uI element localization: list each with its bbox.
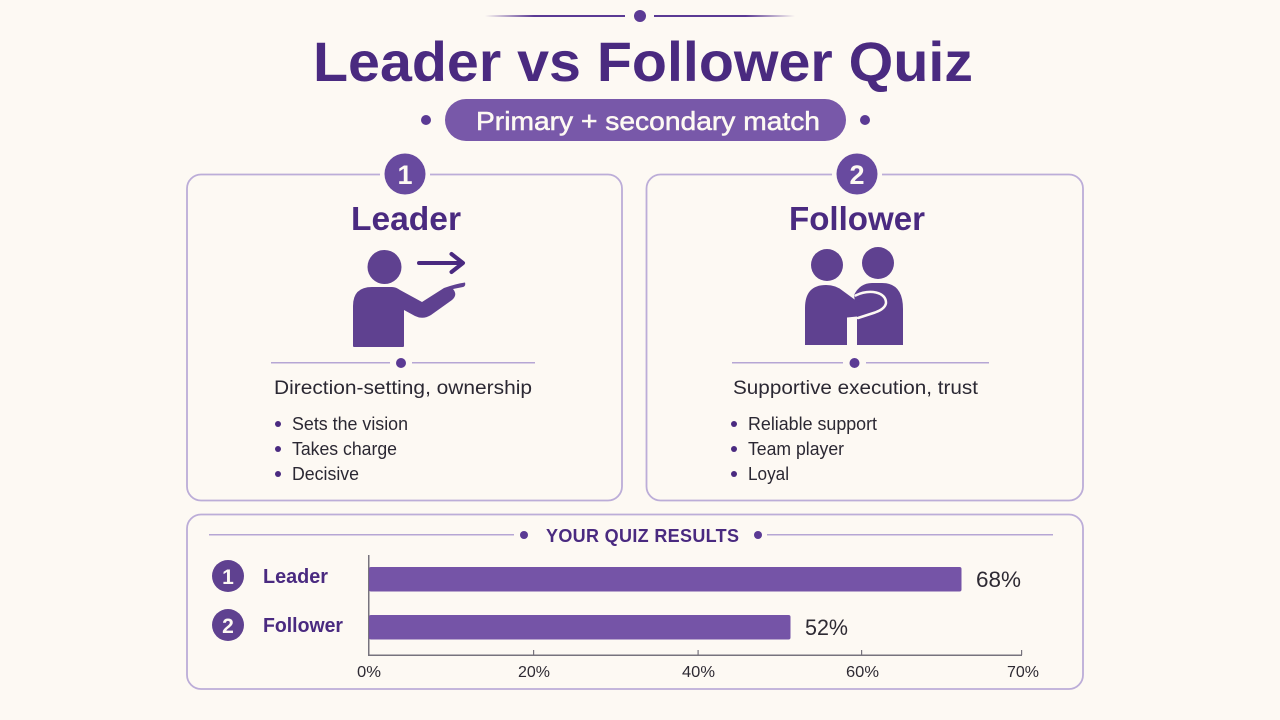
icon: leader pointing with arrow xyxy=(353,250,465,347)
axis labels xyxy=(357,664,1039,681)
bullet list: leader traits xyxy=(275,414,408,484)
heading: leader: Leader xyxy=(351,200,461,237)
badge: 2: 2 xyxy=(849,160,865,190)
title: Leader vs Follower Quiz xyxy=(313,30,973,93)
row label: follower: 2 xyxy=(222,615,234,638)
bullet list: leader traits: Decisive xyxy=(292,464,359,484)
row label: follower: Follower xyxy=(263,615,343,637)
divider xyxy=(271,358,535,368)
results heading xyxy=(209,526,1053,546)
icon: two people supporting xyxy=(805,247,903,345)
row label: leader: Leader xyxy=(263,566,328,588)
axis labels: 60% xyxy=(846,664,879,681)
bar chart xyxy=(357,555,1039,681)
subtitle pill: Primary + secondary match xyxy=(476,106,820,136)
badge: 2 xyxy=(836,154,878,194)
bullet list: follower traits: Team player xyxy=(748,439,844,459)
bullet list: follower traits xyxy=(731,414,877,484)
axis labels: 0% xyxy=(357,664,381,681)
row label: leader xyxy=(212,560,328,592)
axis labels: 40% xyxy=(682,664,715,681)
row label: leader: 1 xyxy=(222,566,234,589)
value: 68%: 68% xyxy=(976,567,1021,592)
axis labels: 70% xyxy=(1007,664,1039,681)
description: leader: Direction-setting, ownership xyxy=(274,378,532,399)
divider xyxy=(732,358,989,368)
results heading: YOUR QUIZ RESULTS xyxy=(546,526,739,546)
row label: follower xyxy=(212,609,343,641)
badge: 1: 1 xyxy=(397,160,413,190)
bullet list: leader traits: Takes charge xyxy=(292,439,397,459)
bar: follower 52% xyxy=(369,615,790,640)
panel: leader xyxy=(187,154,622,500)
panel: quiz results xyxy=(187,514,1083,689)
bullet list: leader traits: Sets the vision xyxy=(292,414,408,434)
bullet list: follower traits: Loyal xyxy=(748,464,789,484)
bar: leader 68% xyxy=(369,567,962,592)
top ornament xyxy=(485,10,795,22)
value: 52%: 52% xyxy=(805,615,848,640)
badge: 1 xyxy=(384,154,426,194)
axis labels: 20% xyxy=(518,664,550,681)
description: follower: Supportive execution, trust xyxy=(733,378,979,399)
subtitle pill xyxy=(421,99,870,141)
panel: follower xyxy=(646,154,1083,500)
bullet list: follower traits: Reliable support xyxy=(748,414,877,434)
heading: follower: Follower xyxy=(789,200,925,237)
